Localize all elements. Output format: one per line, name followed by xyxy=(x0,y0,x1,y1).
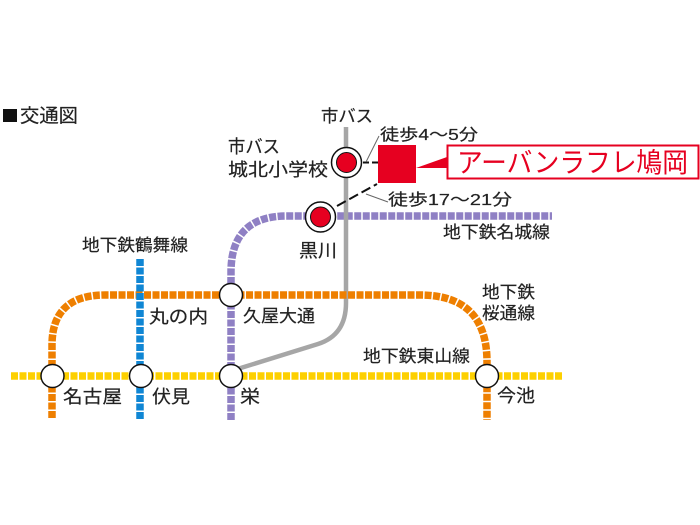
leader: walking 4-5 min xyxy=(366,136,379,162)
label: Sakura-dori subway line: 桜通線 xyxy=(482,304,535,323)
label: city bus Johoku Elementary School: 市バス xyxy=(228,137,280,157)
label: Kurokawa: 黒川 xyxy=(299,241,337,261)
label: Tsurumai subway line: 地下鉄鶴舞線 xyxy=(82,236,188,255)
station: Fushimi xyxy=(130,364,152,388)
label: Fushimi: 伏見 xyxy=(152,387,190,407)
line: Tsurumai subway (blue) xyxy=(136,259,144,420)
leader: walking 17-21 min xyxy=(366,194,388,202)
station: Sakae xyxy=(220,364,242,388)
label: walking 4-5 minutes: 徒歩4～5分 xyxy=(380,126,478,144)
label: Higashiyama subway line: 地下鉄東山線 xyxy=(363,347,470,366)
line: Higashiyama subway (yellow) xyxy=(11,372,563,380)
label: Nagoya: 名古屋 xyxy=(63,387,122,407)
line: Sakura-dori subway (orange) xyxy=(52,295,487,420)
station: Hisaya-odori xyxy=(220,284,242,306)
label: Sakae: 栄 xyxy=(240,387,260,407)
label: Meijo subway line: 地下鉄名城線 xyxy=(443,223,550,242)
line: city bus (grey) xyxy=(231,127,346,371)
callout pointer xyxy=(416,157,447,168)
bus stop: Johoku Elementary School xyxy=(332,148,362,178)
building marker: red square xyxy=(378,145,416,183)
label: Marunouchi: 丸の内 xyxy=(149,307,208,327)
label: city bus: 市バス xyxy=(321,107,373,126)
label: Imaike: 今池 xyxy=(497,386,535,406)
station: Kurokawa xyxy=(306,202,336,232)
station: Imaike xyxy=(476,364,498,388)
label: Hisaya-odori: 久屋大通 xyxy=(243,306,316,326)
walking route: to Kurokawa station xyxy=(337,184,377,206)
callout: property name: アーバンラフレ鳩岡 xyxy=(457,147,688,178)
label: walking 17-21 minutes: 徒歩17～21分 xyxy=(388,191,512,209)
station: Nagoya xyxy=(41,364,64,388)
label: Sakura-dori subway line: 地下鉄 xyxy=(482,283,535,302)
line: Meijo subway (purple) xyxy=(231,216,552,420)
heading: traffic map: 交通図 xyxy=(20,105,78,127)
label: city bus Johoku Elementary School: 城北小学校 xyxy=(228,160,328,180)
walking route: to Johoku school stop xyxy=(363,162,378,164)
